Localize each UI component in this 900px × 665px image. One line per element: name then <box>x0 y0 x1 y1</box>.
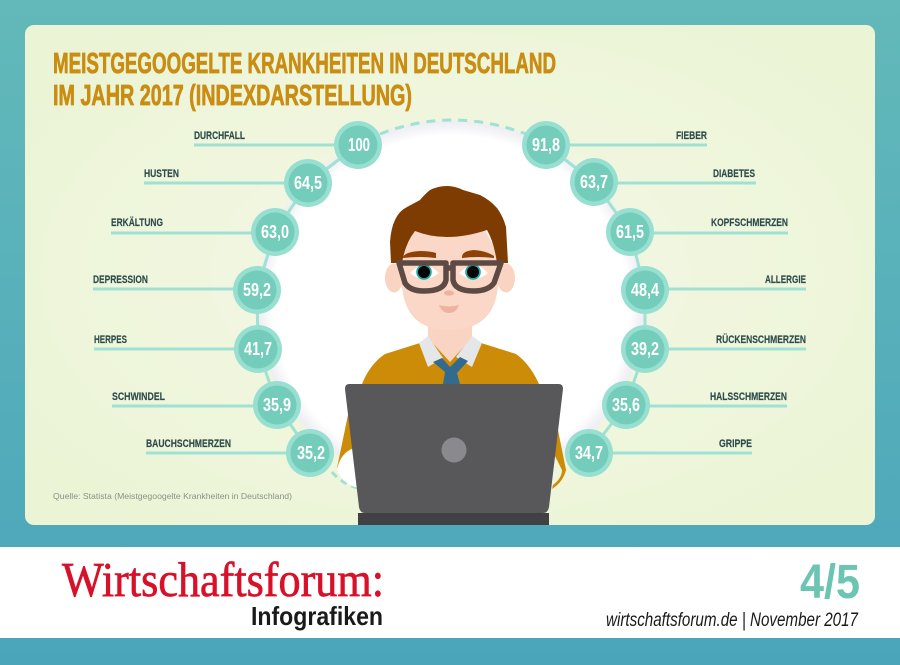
item: Kopfschmerzen: 61,5 <box>616 222 644 242</box>
tie <box>433 357 468 384</box>
item: Schwindel: SCHWINDEL <box>112 391 165 403</box>
item: Kopfschmerzen <box>606 208 788 256</box>
item: Schwindel <box>112 381 301 429</box>
title <box>53 48 556 112</box>
item: Grippe <box>565 429 752 477</box>
footer logo <box>62 552 384 631</box>
item: Fieber: FIEBER <box>676 130 707 142</box>
footer logo: Infografiken <box>251 601 383 631</box>
item: Bauchschmerzen: BAUCHSCHMERZEN <box>146 438 231 450</box>
item: Erkältung <box>111 208 299 256</box>
item: Durchfall <box>194 121 382 169</box>
ears <box>385 264 515 292</box>
item: Rückenschmerzen <box>621 325 806 373</box>
item: Husten: HUSTEN <box>144 168 179 180</box>
left arm <box>337 410 360 468</box>
item: Erkältung: 63,0 <box>261 222 289 242</box>
source note: Quelle: Statista (Meistgegoogelte Krankheiten in Deutschland) <box>53 491 292 501</box>
item: Allergie: ALLERGIE <box>765 274 806 286</box>
nose <box>444 290 454 296</box>
eyes <box>410 264 488 280</box>
item: Rückenschmerzen: RÜCKENSCHMERZEN <box>716 333 806 346</box>
item: Fieber: 91,8 <box>532 135 560 155</box>
laptop lid <box>345 384 563 513</box>
item: Halsschmerzen <box>602 381 787 429</box>
footer logo: Wirtschaftsforum: <box>62 552 384 607</box>
item: Depression <box>93 266 281 314</box>
mouth <box>439 305 459 313</box>
footer issue <box>606 556 860 631</box>
item: Depression: DEPRESSION <box>93 274 148 286</box>
item: Grippe: 34,7 <box>575 443 603 463</box>
left series <box>93 121 382 477</box>
item: Husten <box>144 159 332 207</box>
shirt collar <box>419 336 482 367</box>
left cuff <box>337 448 360 488</box>
item: Rückenschmerzen: 39,2 <box>631 339 659 359</box>
glasses <box>399 263 501 291</box>
item: Bauchschmerzen: 35,2 <box>297 443 325 463</box>
neck <box>428 322 472 362</box>
title: IM JAHR 2017 (INDEXDARSTELLUNG) <box>53 80 412 112</box>
right arm <box>552 420 566 489</box>
item: Kopfschmerzen: KOPFSCHMERZEN <box>711 217 788 229</box>
item: Depression: 59,2 <box>243 280 271 300</box>
item: Allergie: 48,4 <box>631 280 659 300</box>
eyebrows <box>403 250 494 258</box>
footer band <box>0 547 900 638</box>
illustration: man with laptop <box>337 186 566 525</box>
item: Diabetes <box>570 158 756 206</box>
title: MEISTGEGOOGELTE KRANKHEITEN IN DEUTSCHLAND <box>53 48 556 80</box>
item: Halsschmerzen: HALSSCHMERZEN <box>710 391 787 403</box>
sweater <box>362 343 539 384</box>
item: Durchfall: 100 <box>348 135 370 155</box>
right series <box>522 121 806 477</box>
hair <box>390 186 508 263</box>
ring connectors <box>257 120 645 488</box>
item: Fieber <box>522 121 707 169</box>
item: Diabetes: DIABETES <box>713 168 755 180</box>
item: Diabetes: 63,7 <box>580 172 608 192</box>
item: Herpes: HERPES <box>94 334 127 346</box>
item: Husten: 64,5 <box>294 173 322 193</box>
footer issue: 4/5 <box>800 556 860 609</box>
face <box>402 220 498 330</box>
item: Halsschmerzen: 35,6 <box>612 395 640 415</box>
item: Allergie <box>621 266 806 314</box>
laptop base <box>358 513 549 525</box>
laptop logo <box>442 438 466 462</box>
item: Herpes: 41,7 <box>244 339 272 359</box>
item: Schwindel: 35,9 <box>263 395 291 415</box>
item: Grippe: GRIPPE <box>719 438 752 450</box>
item: Herpes <box>94 325 282 373</box>
item: Bauchschmerzen <box>146 429 334 477</box>
item: Durchfall: DURCHFALL <box>194 130 245 142</box>
item: Erkältung: ERKÄLTUNG <box>111 216 163 229</box>
panel: main chart <box>25 25 875 525</box>
